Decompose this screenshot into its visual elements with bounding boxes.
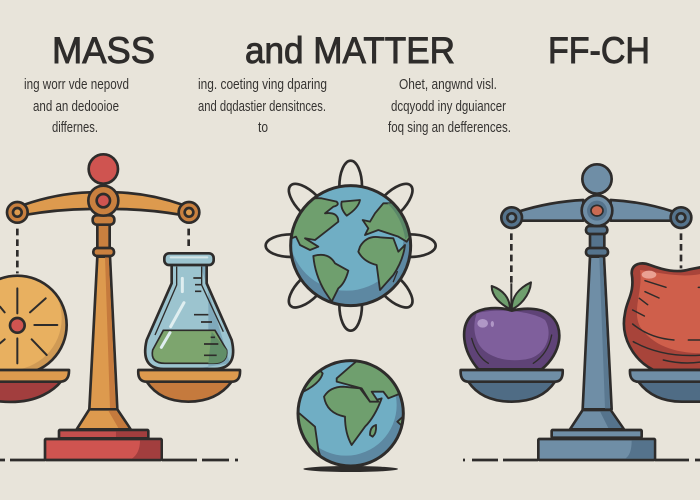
flask	[145, 265, 233, 369]
beam	[23, 192, 90, 215]
text block: right column: dcqyodd iny dguiancer	[391, 98, 506, 115]
lower globe shadow	[303, 466, 398, 472]
knobs	[7, 202, 28, 223]
text block: left column: and an dedooioe	[33, 98, 119, 115]
column	[89, 257, 117, 409]
text block: left column: differnes.	[52, 119, 98, 136]
top ball	[582, 164, 612, 194]
base	[552, 430, 642, 438]
top ball	[89, 154, 118, 184]
americas	[304, 371, 324, 392]
heading: FF-CH: FF-CH	[548, 30, 650, 71]
left pan	[0, 381, 62, 402]
text block: centre column: to	[258, 119, 268, 136]
heading: MASS: MASS	[52, 30, 155, 71]
ground line	[0, 459, 700, 461]
africa	[358, 237, 405, 290]
knobs	[501, 207, 522, 228]
text block: right column: foq sing an defferences.	[388, 119, 511, 136]
madagascar	[370, 425, 376, 437]
hanging dashes	[511, 233, 681, 285]
text block: right column: Ohet, angwnd visl.	[399, 76, 497, 93]
icon: purple fruit	[464, 308, 559, 369]
eurasia	[336, 362, 398, 403]
text block: centre column: ing. coeting ving dparing	[198, 76, 327, 93]
south america	[313, 255, 348, 302]
left balance scale	[0, 154, 240, 460]
heading: and MATTER: and MATTER	[245, 30, 455, 71]
text block: centre column	[198, 76, 327, 136]
wheel object	[0, 276, 67, 374]
right pan	[147, 382, 232, 402]
orbit petals	[266, 161, 436, 331]
column	[583, 257, 612, 409]
hub	[582, 195, 612, 226]
upper globe sphere	[291, 186, 411, 306]
text block: left column: ing worr vde nepovd	[24, 76, 129, 93]
icon: red sack	[624, 263, 700, 370]
icon: leaves	[492, 286, 510, 309]
north america	[287, 198, 338, 250]
foot	[570, 410, 624, 429]
eurasia	[363, 203, 415, 242]
beam	[518, 200, 583, 221]
hub	[88, 186, 118, 216]
africa	[324, 387, 382, 445]
text block: left column	[24, 76, 129, 136]
text block: right column	[388, 76, 511, 136]
text block: centre column: and dqdastier densitnces.	[198, 98, 326, 115]
hanging dashes	[17, 229, 189, 273]
right balance scale	[461, 164, 700, 460]
base	[59, 430, 148, 438]
globes	[266, 161, 436, 472]
foot	[77, 409, 131, 429]
greenland	[341, 200, 360, 216]
lower globe sphere	[298, 361, 403, 466]
left pan	[468, 382, 555, 402]
right pan	[638, 382, 700, 402]
